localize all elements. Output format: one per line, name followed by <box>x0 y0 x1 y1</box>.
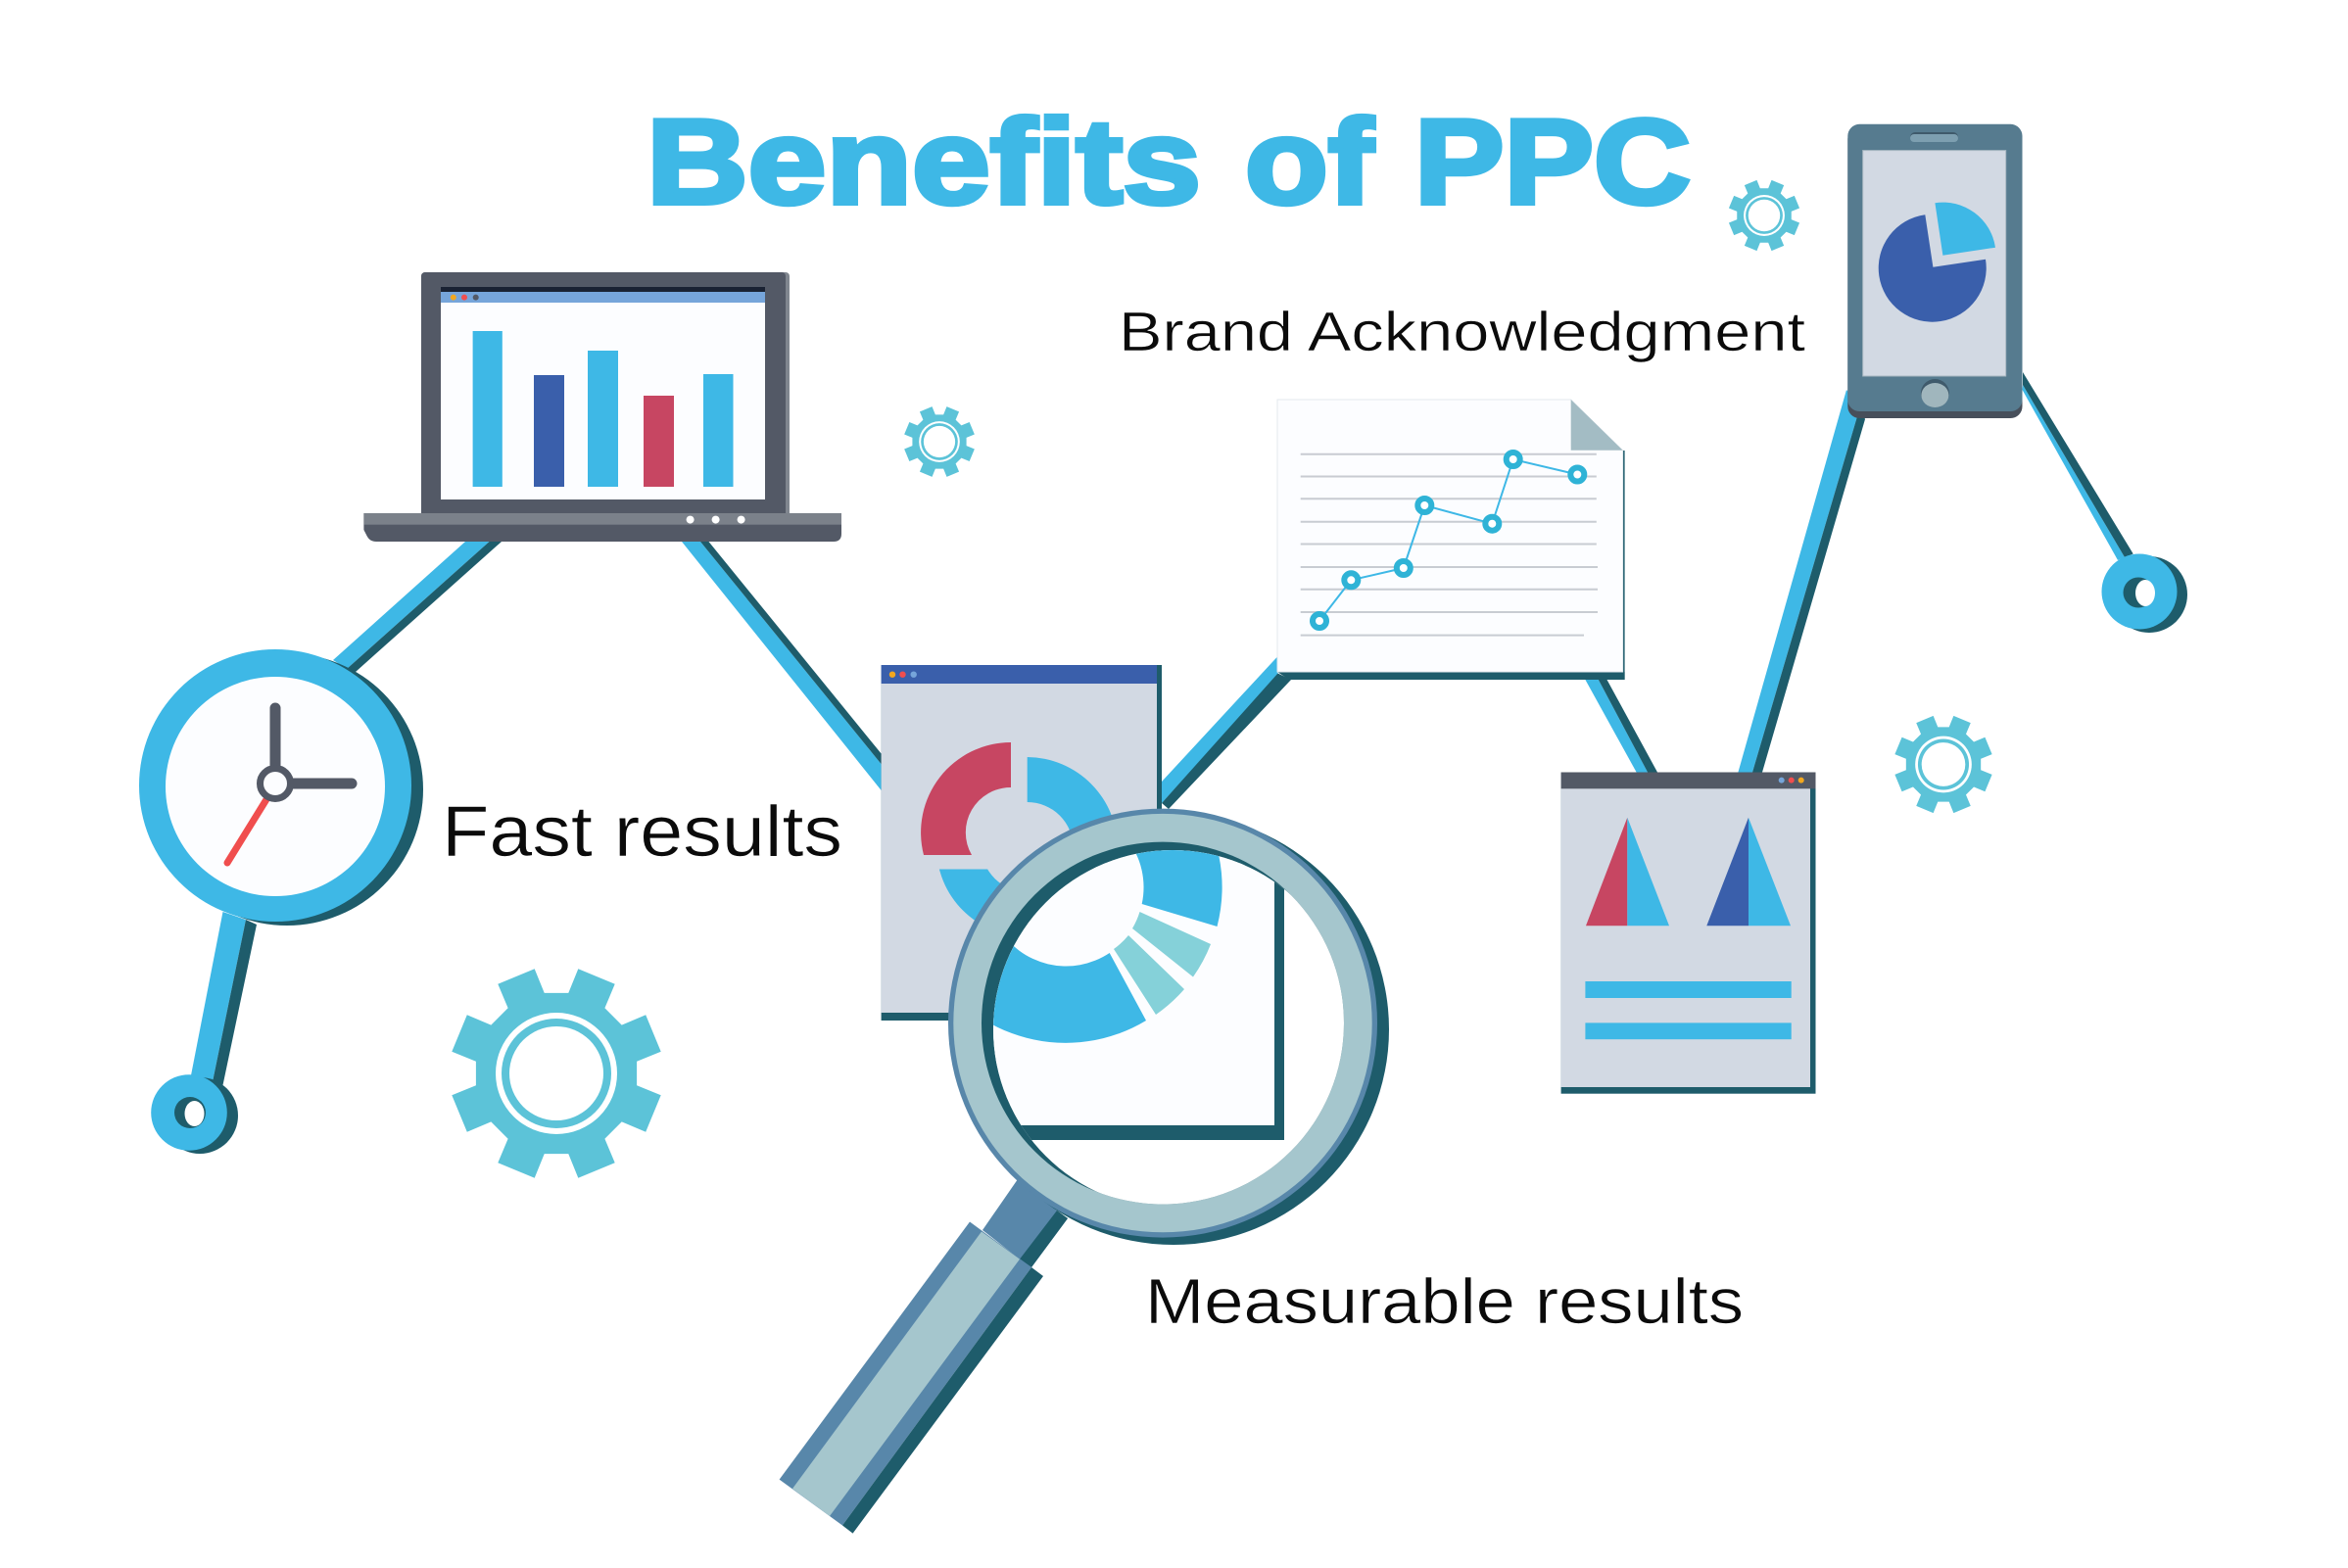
connector: report panel to phone <box>1738 390 1865 772</box>
label: Measurable results: Measurable results <box>1145 1265 1744 1337</box>
connector: document to report panel <box>1585 680 1657 772</box>
connector: clock to laptop <box>333 542 502 672</box>
text bars <box>1585 981 1792 1039</box>
lower-left node <box>151 1074 238 1154</box>
title: of <box>1245 96 1374 229</box>
infographic: Benefits of PPC <box>139 114 2187 1534</box>
chart gridlines <box>1301 454 1598 636</box>
phone with pie chart <box>1847 124 2022 418</box>
triangle chart <box>1586 818 1791 926</box>
magnifying glass <box>780 732 1391 1534</box>
label: Brand Acknowledgment: Brand Acknowledgment <box>1119 301 1805 363</box>
laptop with bar chart <box>363 272 841 542</box>
handle <box>780 1179 1068 1534</box>
bar chart <box>473 331 733 487</box>
icon: small gear centre <box>904 406 975 477</box>
icon: small gear top right <box>1729 180 1799 251</box>
label: Fast results: Fast results <box>442 792 842 872</box>
title: Benefits <box>647 96 1201 229</box>
connector: clock to lower node <box>191 912 257 1085</box>
panel: report with triangles <box>1561 772 1816 1094</box>
right node <box>2102 554 2187 633</box>
clock hands <box>227 708 352 863</box>
icon: large gear <box>452 969 661 1178</box>
donut segments <box>921 742 1111 921</box>
panel: line chart document <box>1277 400 1625 680</box>
connector: laptop to donut panel <box>682 542 882 791</box>
pie chart <box>1879 203 1995 322</box>
connector: donut panel to document <box>1162 656 1291 809</box>
connector: phone to right node <box>2022 372 2133 560</box>
title <box>647 96 1691 229</box>
title: PPC <box>1414 96 1691 229</box>
laptop base <box>363 513 841 542</box>
clock <box>139 649 423 926</box>
icon: medium gear right <box>1894 716 1992 813</box>
lens ring <box>948 809 1389 1245</box>
lens content: magnified donut chart <box>993 850 1344 1205</box>
panel: donut chart window <box>882 665 1162 1021</box>
line chart series <box>1313 452 1584 628</box>
